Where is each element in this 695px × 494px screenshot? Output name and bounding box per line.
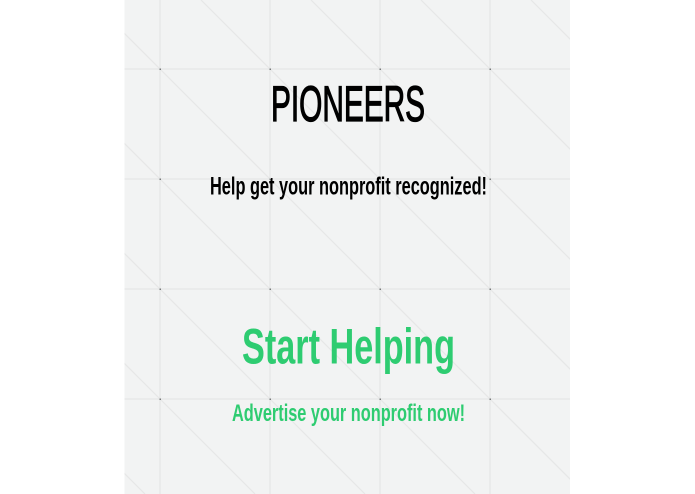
subtitle: Help get your nonprofit recognized! <box>210 172 487 200</box>
call to action subtext: Advertise your nonprofit now! <box>232 400 465 427</box>
title: PIONEERS <box>271 76 425 132</box>
call to action heading: Start Helping <box>242 318 455 374</box>
panel: patterned background <box>124 0 570 494</box>
